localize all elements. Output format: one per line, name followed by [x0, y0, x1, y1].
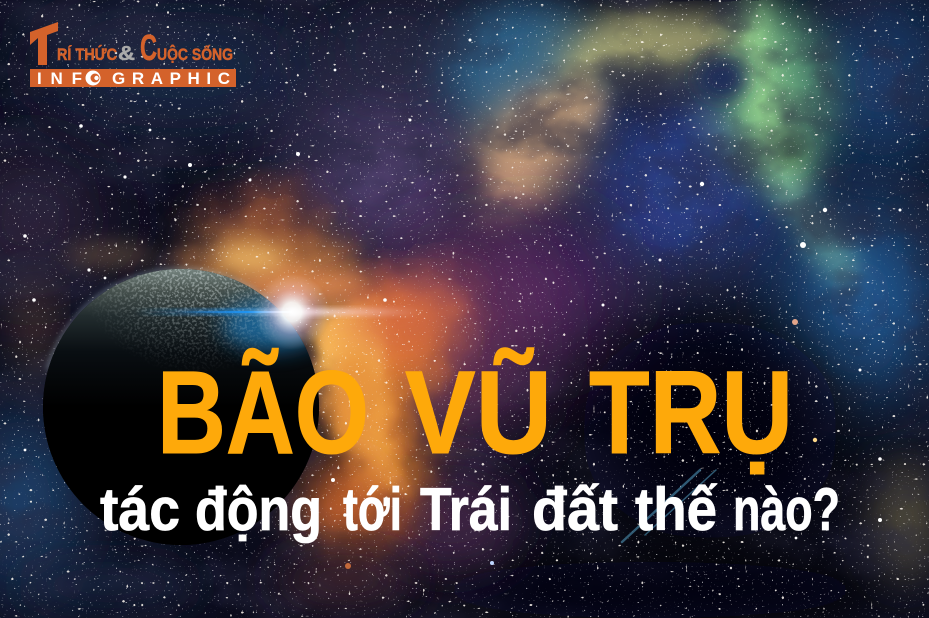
logo banner — [30, 69, 236, 87]
logo wordmark: RÍ THỨC — [57, 45, 117, 64]
word: BÃO: BÃO — [157, 347, 369, 479]
light streak near subtitle — [622, 470, 716, 542]
logo wordmark: C — [140, 27, 157, 68]
banner text: INFOGRAPHIC: GRAPHIC — [112, 69, 230, 88]
word: TRỤ: TRỤ — [589, 347, 793, 479]
word: tới: tới — [343, 476, 402, 543]
logo wordmark — [57, 27, 233, 68]
logo T mark — [30, 22, 58, 65]
word: nào?: nào? — [733, 476, 840, 543]
word: thế: thế — [635, 476, 718, 543]
nebula: fiery glow around planet — [19, 195, 615, 605]
word: VŨ: VŨ — [405, 347, 552, 479]
nebula: upper right arch — [447, 10, 845, 272]
banner text: INFOGRAPHIC: INF — [37, 69, 82, 88]
word: đất: đất — [532, 476, 618, 543]
word: tác: tác — [100, 476, 180, 543]
logo: Tri Thuc & Cuoc Song Infographic — [30, 22, 236, 88]
subtitle: tác động tới Trái đất thế nào? — [100, 476, 840, 543]
banner text: INFOGRAPHIC — [37, 69, 230, 88]
word: động: động — [195, 476, 322, 543]
word: Trái: Trái — [420, 476, 512, 543]
logo wordmark: & — [118, 43, 135, 65]
lens flare — [135, 274, 422, 350]
banner icon: swirl O — [86, 70, 100, 86]
logo wordmark: UỘC SỐNG — [157, 44, 233, 64]
planet — [40, 265, 325, 545]
dark void lower right — [420, 320, 880, 618]
title: BÃO VŨ TRỤ — [157, 347, 793, 479]
